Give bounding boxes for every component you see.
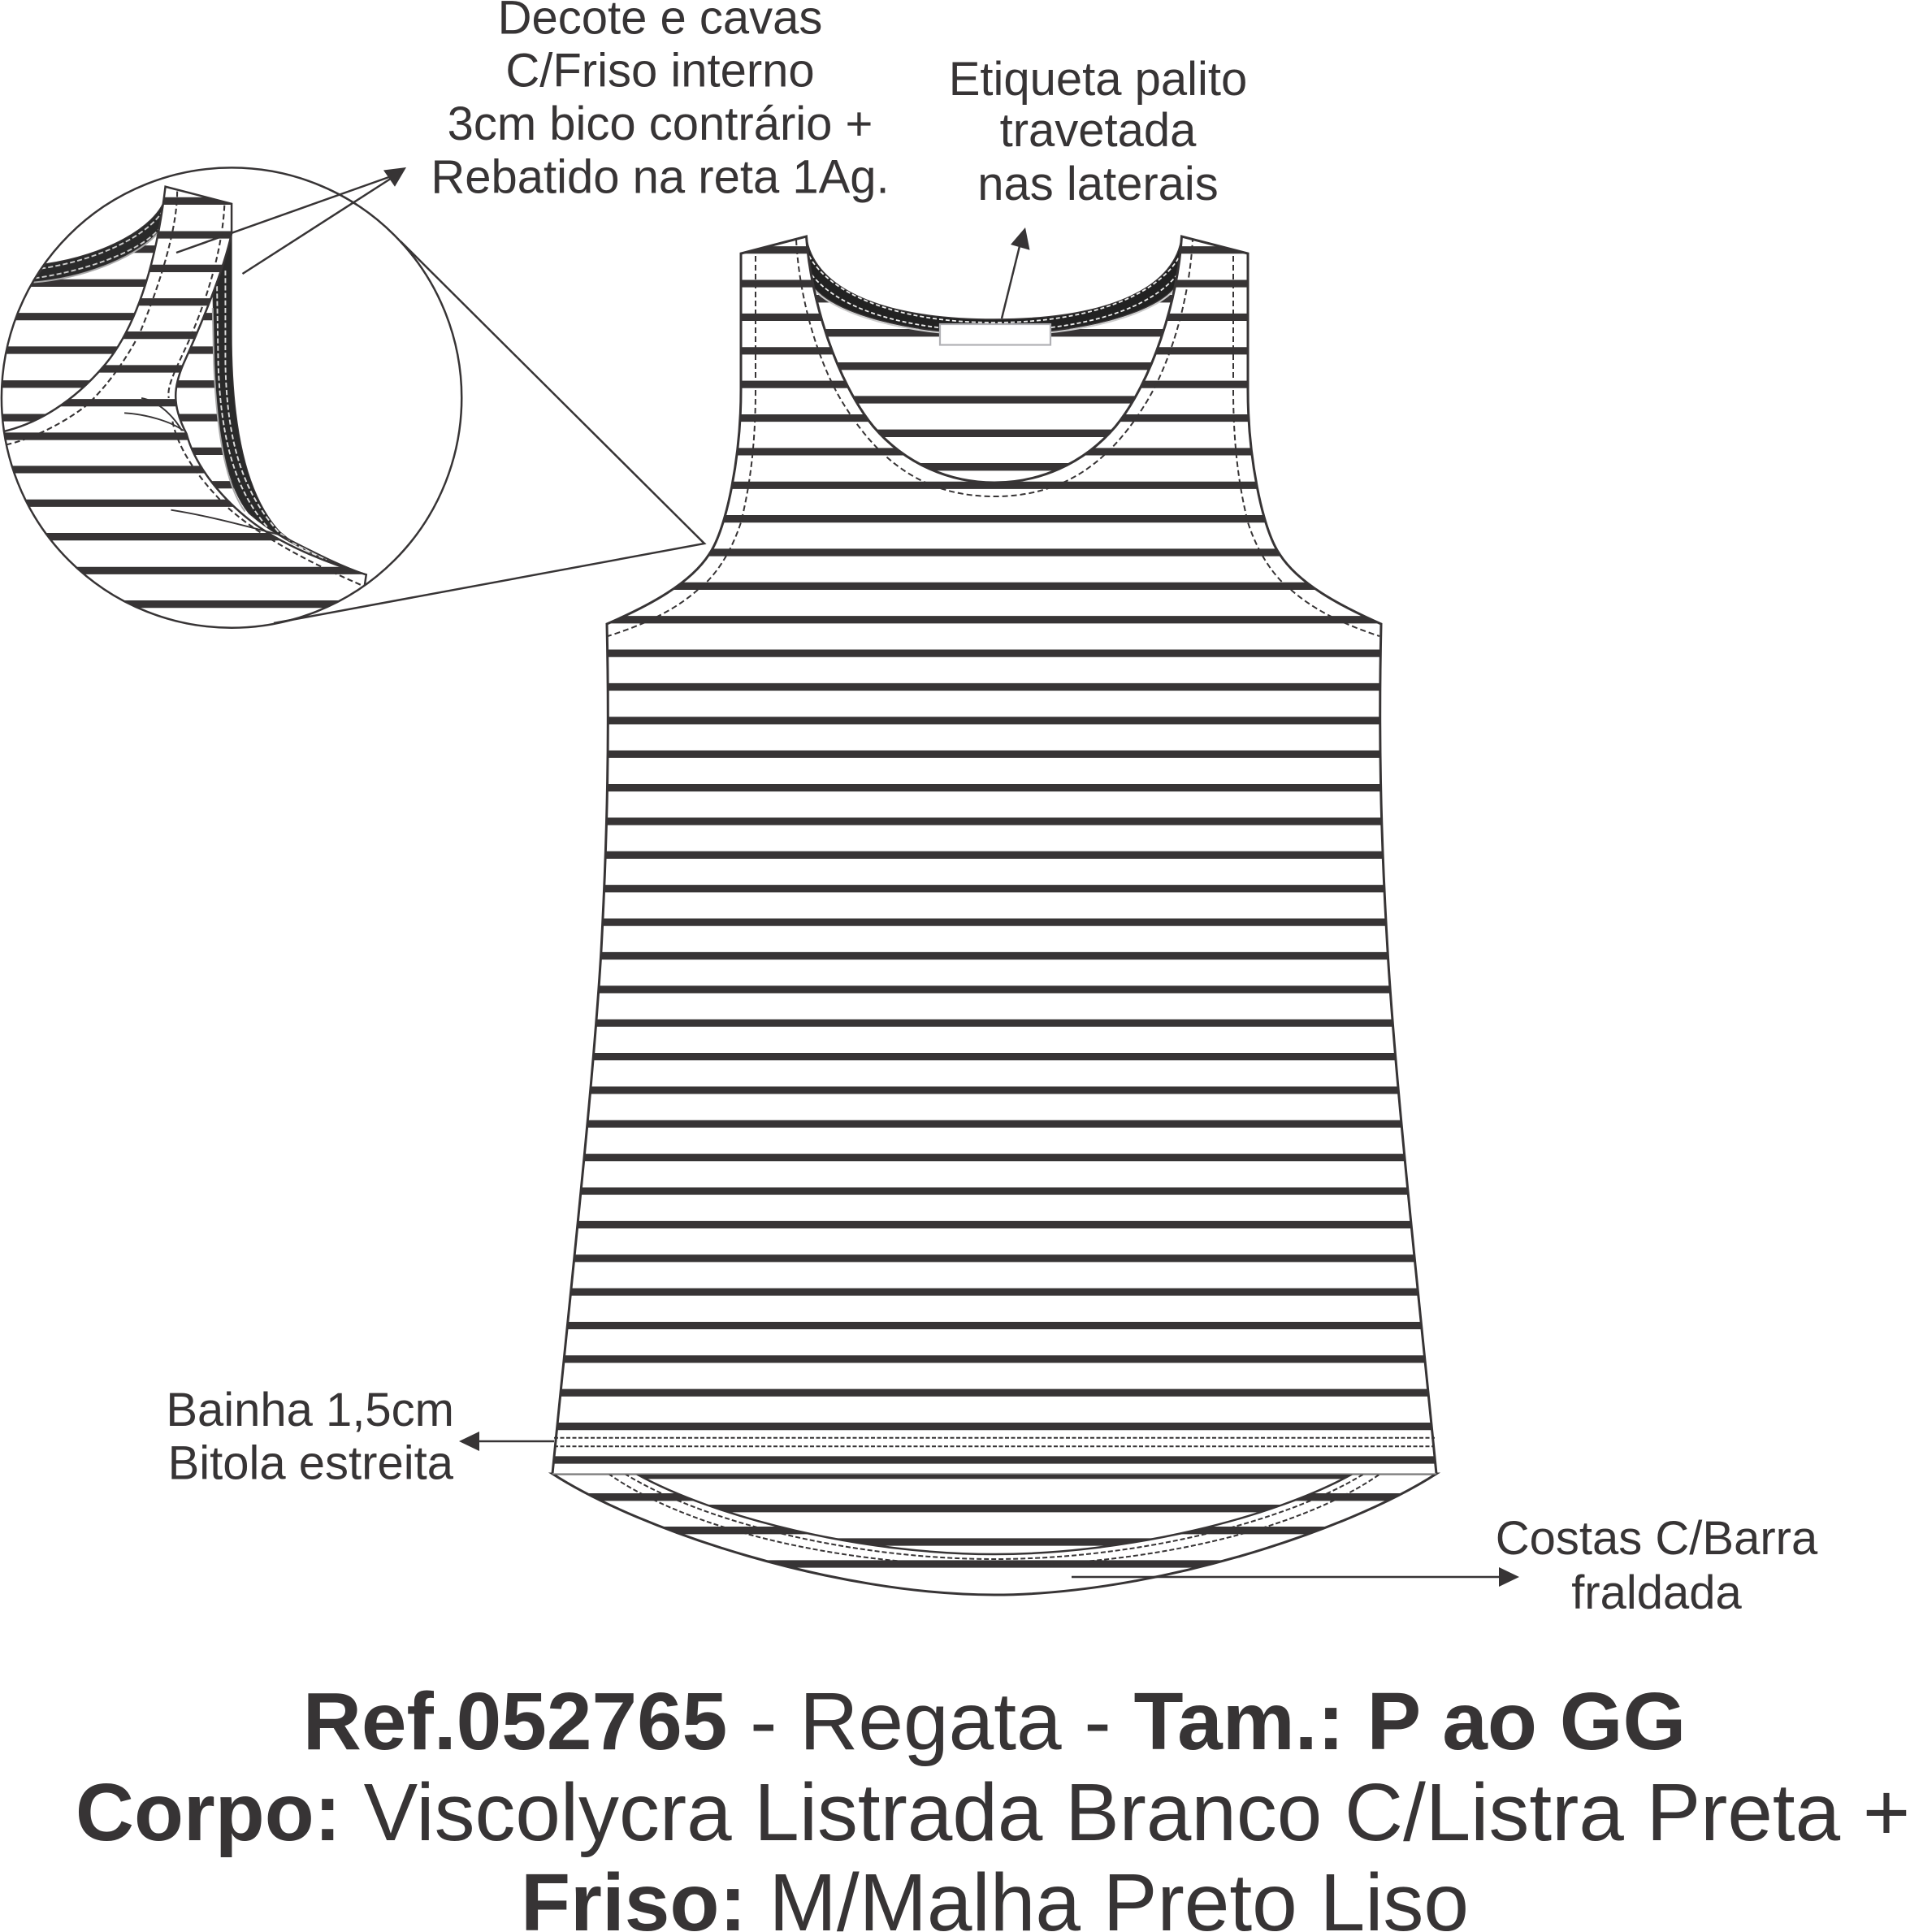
title block: Corpo: Viscolycra Listrada Branco C/Listra Preta + — [76, 1768, 1910, 1858]
arrow: to neckline and armhole note — [176, 167, 406, 274]
note: label: Etiqueta palito — [949, 53, 1247, 106]
note: back hem: fraldada — [1571, 1566, 1743, 1619]
note: neckline and armholes — [431, 0, 890, 203]
detail armhole binding — [211, 235, 340, 565]
care label — [940, 324, 1050, 344]
magnifier callout lines — [274, 241, 704, 623]
detail circle outline — [2, 167, 461, 628]
detail stitching and creases — [6, 191, 366, 586]
note: neckline and armholes: C/Friso interno — [505, 44, 815, 97]
inside back neck with stripes — [804, 295, 1186, 470]
arrow: to label note — [1002, 227, 1030, 318]
back hem: curved shirt-tail — [548, 1472, 1440, 1596]
detail front strap and body — [5, 185, 367, 608]
title block: Ref.052765 - Regata - Tam.: P ao GG — [303, 1676, 1686, 1767]
note: back hem: Costas C/Barra — [1496, 1512, 1818, 1565]
neck binding band — [806, 236, 1181, 336]
note: label — [949, 53, 1247, 210]
note: label: nas laterais — [977, 158, 1219, 210]
detail neck binding — [33, 199, 165, 283]
stitching lines — [554, 240, 1435, 1446]
arrow: to back hem note — [1072, 1567, 1519, 1587]
note: hem: Bainha 1,5cm — [166, 1384, 454, 1436]
back layer stripes — [2, 245, 234, 489]
note: back hem — [1496, 1512, 1818, 1619]
garment: striped tank top technical drawing — [487, 236, 1544, 1595]
detail magnifier circle — [0, 167, 487, 643]
note: neckline and armholes: 3cm bico contrário + — [448, 97, 873, 150]
note: neckline and armholes: Rebatido na reta 1Ag. — [431, 151, 890, 203]
title block — [76, 1676, 1910, 1932]
note: label: travetada — [1000, 104, 1197, 157]
note: hem — [166, 1384, 454, 1490]
arrow: to hem note — [459, 1432, 554, 1451]
note: hem: Bitola estreita — [168, 1436, 454, 1490]
front body with stripes — [551, 235, 1438, 1475]
